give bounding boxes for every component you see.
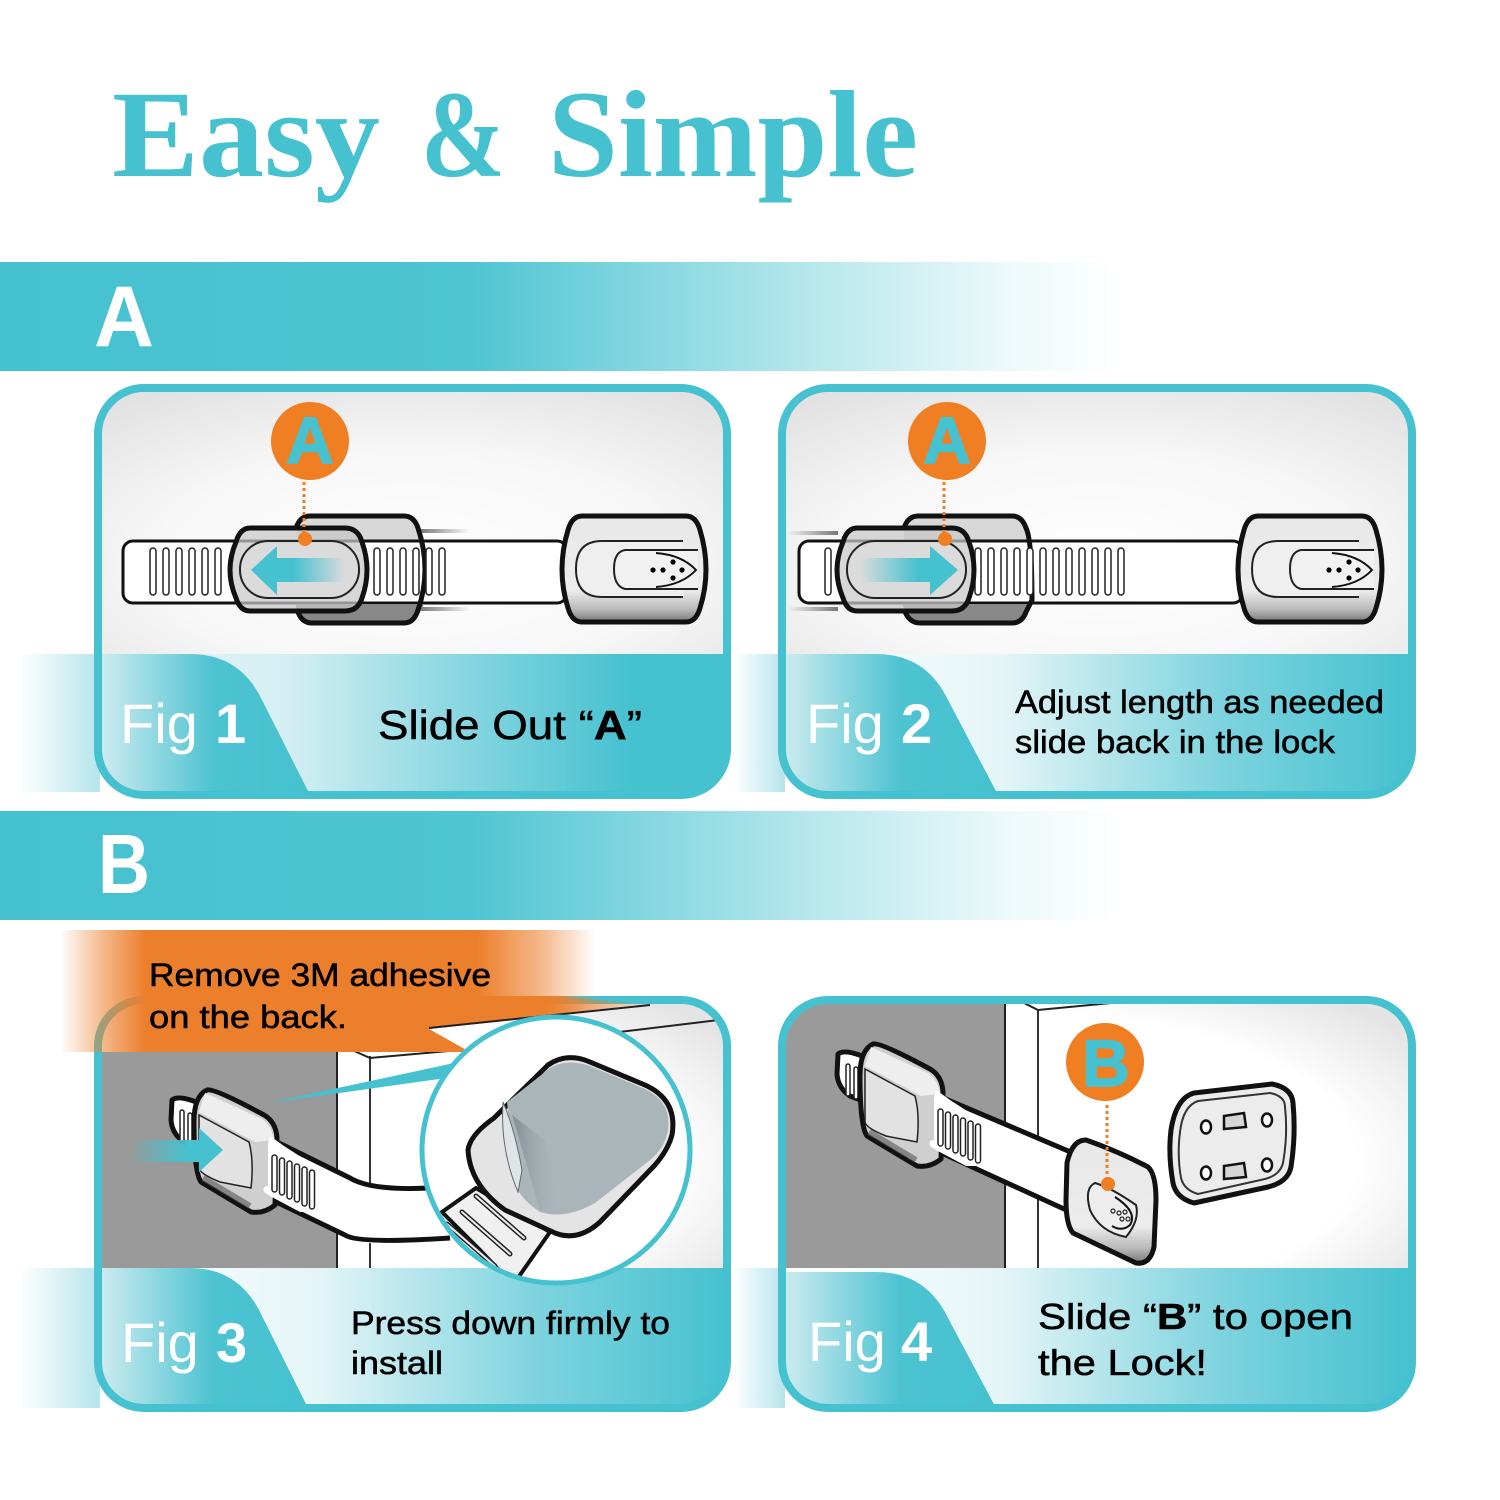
panel: figure 1 [20, 388, 727, 795]
title [112, 66, 918, 203]
caption 3: install [351, 1345, 443, 1381]
banner: remove adhesive [60, 930, 650, 1052]
caption 3: Press down firmly to [351, 1305, 670, 1341]
figure label 3: 3 [216, 1311, 247, 1374]
illustration: strap and lock sliding out [123, 516, 706, 623]
icon: mounting plate [1170, 1084, 1294, 1203]
title: & [421, 66, 505, 203]
caption 2: slide back in the lock [1015, 724, 1336, 760]
callout: B marker [1066, 1023, 1144, 1191]
section band A [0, 262, 1120, 371]
illustration: lock with strap [837, 1044, 1156, 1263]
callout: A marker: A [286, 403, 334, 477]
figure label 1: 1 [215, 692, 246, 755]
panel: figure 3 [20, 930, 727, 1408]
banner: remove adhesive: Remove 3M adhesive [149, 957, 491, 993]
icon: press arrow [134, 1128, 223, 1172]
figure label 4: Fig [808, 1310, 886, 1373]
figure label 2: Fig [806, 692, 884, 755]
section letter A: A [94, 269, 154, 365]
callout: A marker: A [923, 403, 971, 477]
callout: A marker [271, 402, 349, 546]
illustration: strap and lock sliding back [788, 516, 1382, 623]
callout: B marker: B [1082, 1026, 1130, 1100]
caption 4 [1038, 1296, 1353, 1383]
caption 1: Slide Out “ A” [378, 702, 642, 748]
caption 2: Adjust length as needed [1015, 684, 1384, 720]
caption 4: Slide “ B” to open [1038, 1296, 1353, 1337]
icon: left arrow [251, 546, 345, 595]
caption 4: the Lock! [1038, 1342, 1207, 1383]
callout: A marker [908, 402, 986, 546]
panel: figure 2 [733, 388, 1412, 795]
section band B [0, 811, 1120, 920]
title: Easy [112, 66, 380, 203]
pointer wedge to magnifier [268, 1062, 459, 1103]
caption 3 [351, 1305, 670, 1381]
figure label 3: Fig [121, 1311, 199, 1374]
illustration: lock on door [134, 1062, 459, 1212]
figure label 4: 4 [901, 1310, 932, 1373]
caption 2 [1015, 684, 1384, 760]
section letter B: B [98, 817, 150, 911]
icon: right arrow [860, 546, 958, 595]
title: Simple [548, 66, 918, 203]
figure label 1: Fig [120, 692, 198, 755]
panel: figure 4 [733, 1000, 1412, 1408]
banner: remove adhesive: on the back. [149, 999, 347, 1035]
magnifier: adhesive backing [422, 1017, 690, 1285]
figure label 2: 2 [901, 692, 932, 755]
